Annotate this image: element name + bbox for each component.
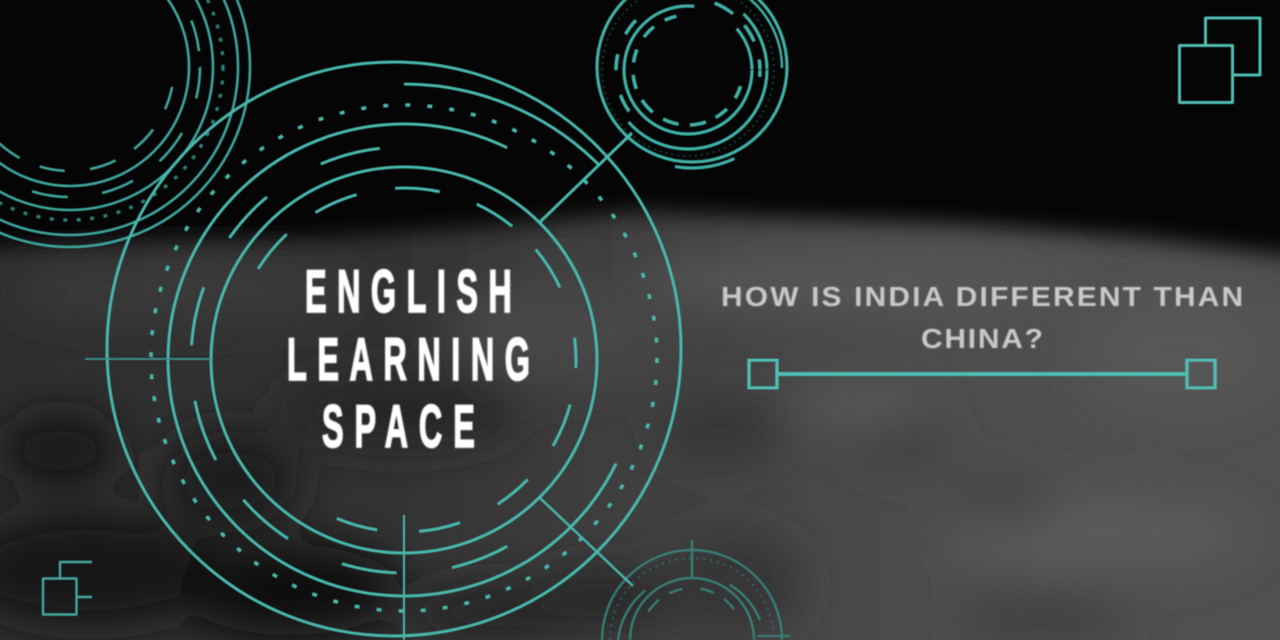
graphic: all teal circle rings	[0, 0, 792, 640]
subtitle question	[721, 282, 1243, 355]
main concentric circle	[85, 62, 681, 640]
dash ring	[191, 147, 617, 573]
icon: overlapping squares top right	[1180, 18, 1260, 102]
tick: bottom	[403, 515, 405, 640]
icon: overlapping squares bottom left	[43, 562, 92, 614]
inner ring	[211, 167, 597, 553]
connector: top	[540, 133, 632, 222]
title: English Learning Space: SPACE	[322, 393, 475, 461]
background: space and blurred earth	[0, 201, 1280, 640]
subtitle question: CHINA?	[921, 324, 1043, 355]
rings: top circle	[592, 0, 792, 168]
dotted ring	[151, 105, 657, 611]
middle arc ring	[168, 124, 640, 596]
outer ring	[107, 62, 681, 636]
title: English Learning Space	[287, 258, 530, 461]
divider: line with two squares	[749, 360, 1215, 388]
rings: bottom circle	[602, 540, 790, 640]
outer arc	[404, 84, 600, 166]
rings: top-left circle	[0, 0, 250, 247]
title: English Learning Space: LEARNING	[287, 326, 530, 394]
connector: bottom	[540, 498, 633, 586]
title: English Learning Space: ENGLISH	[305, 258, 512, 326]
subtitle question: HOW IS INDIA DIFFERENT THAN	[721, 282, 1243, 313]
inner dash ring	[232, 188, 576, 532]
tick: bottom circle	[691, 540, 693, 578]
tick: left	[85, 358, 211, 360]
